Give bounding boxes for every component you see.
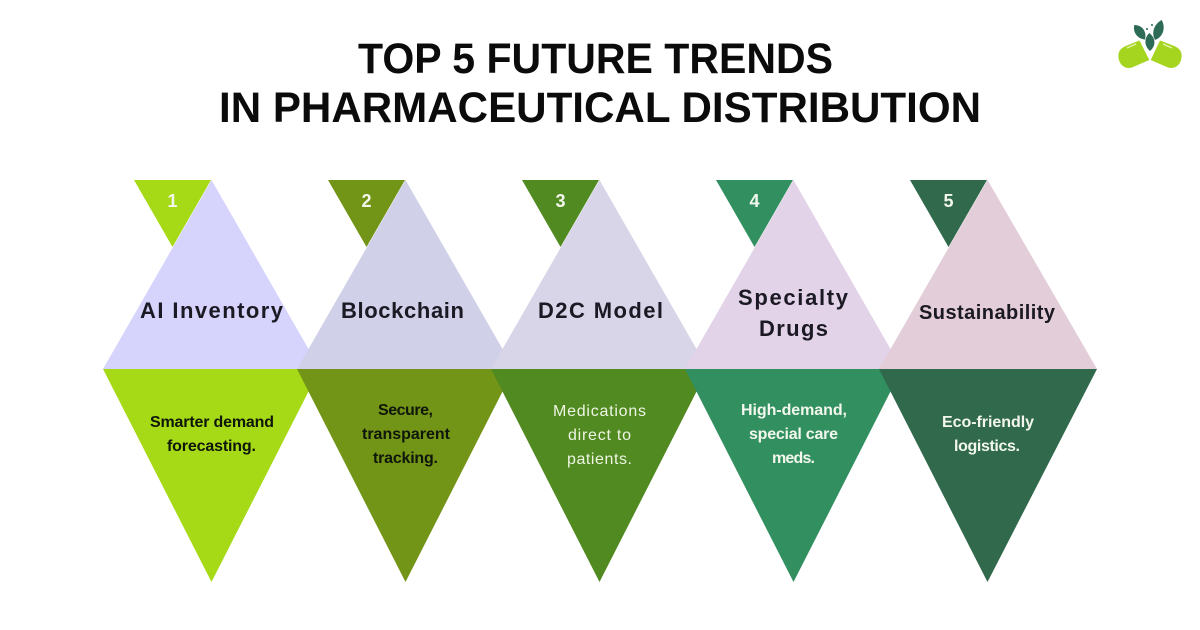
number badge 2: 2 (361, 191, 372, 211)
step 4: Specialty Drugs (685, 180, 902, 582)
text: eco-friendly logistics (942, 414, 1034, 455)
heading: Sustainability: Sustainability (919, 302, 1056, 324)
number badge 1: 1 (167, 191, 178, 211)
heading: Specialty Drugs: Specialty (738, 285, 849, 310)
text: eco-friendly logistics: Eco-friendly (942, 414, 1034, 431)
logo: capsule with leaves (1118, 20, 1182, 68)
number badge 4: 4 (749, 191, 760, 211)
upper triangle 3 (491, 180, 708, 369)
number badge 4 (716, 180, 793, 247)
lower triangle 2 (297, 369, 514, 582)
heading: D2C Model: D2C Model (538, 298, 663, 323)
text: medications direct to patients: direct to (568, 427, 631, 444)
text: secure transparent tracking: transparent (362, 426, 451, 443)
text: medications direct to patients: patients. (567, 451, 632, 468)
text: secure transparent tracking: Secure, (378, 402, 433, 419)
lower triangle 1 (103, 369, 320, 582)
title: IN PHARMACEUTICAL DISTRIBUTION (219, 84, 981, 132)
text: eco-friendly logistics: logistics. (954, 438, 1020, 455)
number badge 5 (910, 180, 987, 247)
text: smarter demand forecasting: forecasting. (167, 438, 256, 455)
step 1: AI Inventory (103, 180, 320, 582)
text: high-demand special care meds: special care (749, 426, 838, 443)
lower triangle 5 (879, 369, 1097, 582)
heading: Specialty Drugs: Drugs (759, 316, 828, 341)
lower triangle 3 (491, 369, 708, 582)
text: medications direct to patients (553, 403, 646, 468)
lower triangle 4 (685, 369, 902, 582)
text: high-demand special care meds: High-demand, (741, 402, 847, 419)
step 5: Sustainability (879, 180, 1097, 582)
text: medications direct to patients: Medications (553, 403, 646, 420)
text: secure transparent tracking: tracking. (373, 450, 438, 467)
number badge 3 (522, 180, 599, 247)
text: smarter demand forecasting: Smarter demand (150, 414, 274, 431)
number badge 5: 5 (943, 191, 954, 211)
text: high-demand special care meds: meds. (772, 450, 815, 467)
text: secure transparent tracking (362, 402, 451, 467)
number badge 3: 3 (555, 191, 566, 211)
step 2: Blockchain (297, 180, 514, 582)
step 3: D2C Model (491, 180, 708, 582)
number badge 2 (328, 180, 405, 247)
text: high-demand special care meds (741, 402, 847, 467)
number badge 1 (134, 180, 211, 247)
heading: Specialty Drugs (738, 285, 849, 341)
upper triangle 2 (297, 180, 514, 369)
heading: AI Inventory: AI Inventory (140, 298, 284, 323)
upper triangle 5 (879, 180, 1097, 369)
heading: Blockchain: Blockchain (341, 298, 464, 323)
upper triangle 4 (685, 180, 902, 369)
title (219, 35, 981, 132)
upper triangle 1 (103, 180, 320, 369)
text: smarter demand forecasting (150, 414, 274, 455)
title: TOP 5 FUTURE TRENDS (358, 35, 833, 83)
